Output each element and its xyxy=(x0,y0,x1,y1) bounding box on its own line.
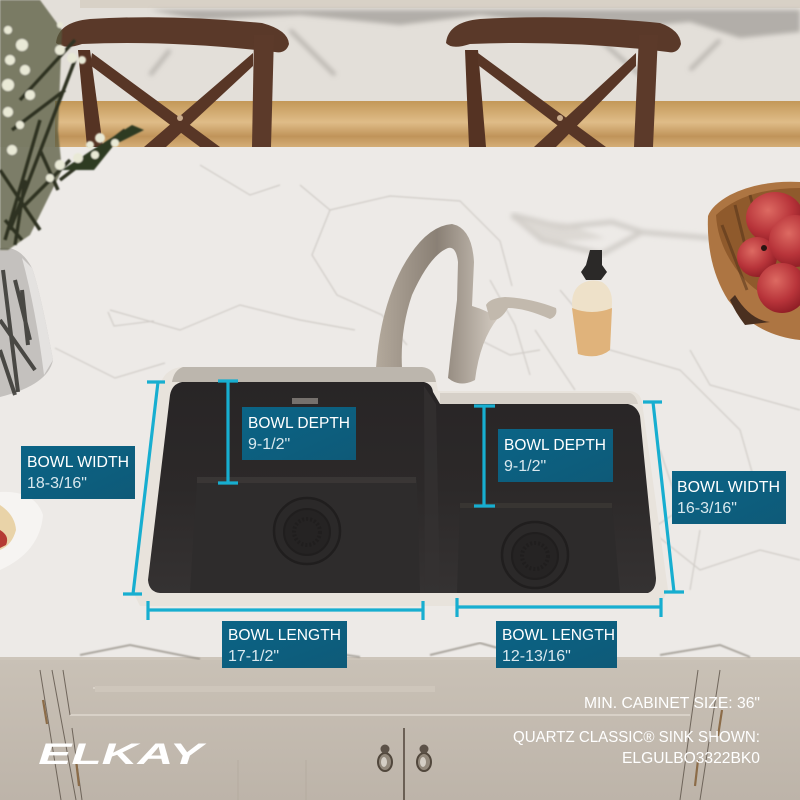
cabinet size text: MIN. CABINET SIZE: 36" xyxy=(584,695,760,712)
label: left bowl length xyxy=(222,621,347,668)
plant and vase xyxy=(0,0,144,397)
drain left xyxy=(274,498,340,564)
marble countertop xyxy=(0,147,800,660)
label: right bowl width: 16-3/16" xyxy=(677,500,737,517)
drain right xyxy=(502,522,568,588)
label: left bowl width: 18-3/16" xyxy=(27,475,87,492)
label: left bowl width xyxy=(21,446,135,499)
dimension: left bowl length xyxy=(147,601,423,620)
label: left bowl length: BOWL LENGTH xyxy=(228,627,341,644)
sink xyxy=(132,367,668,606)
label: right bowl width: BOWL WIDTH xyxy=(677,479,780,496)
label: right bowl depth: 9-1/2" xyxy=(504,458,546,475)
label: left bowl depth: 9-1/2" xyxy=(248,436,290,453)
rim xyxy=(132,367,668,606)
dimension: right bowl width xyxy=(643,402,684,592)
label: right bowl length: 12-13/16" xyxy=(502,648,571,665)
wooden bowl with apples xyxy=(708,182,800,340)
label: left bowl depth: BOWL DEPTH xyxy=(248,415,350,432)
divider xyxy=(424,386,440,593)
logo: Elkay: ELKAY xyxy=(38,737,207,771)
chair right xyxy=(446,17,681,147)
dimension: left bowl depth xyxy=(218,381,238,483)
label: right bowl length xyxy=(496,621,617,668)
faucet xyxy=(376,224,556,384)
chair left xyxy=(56,17,289,147)
background room: rug and floor xyxy=(0,0,800,148)
label: right bowl length: BOWL LENGTH xyxy=(502,627,615,644)
dimension: left bowl width xyxy=(123,382,165,594)
label: right bowl depth: BOWL DEPTH xyxy=(504,437,606,454)
floor right xyxy=(457,505,620,593)
sink model text: ELGULBO3322BK0 xyxy=(622,750,760,767)
dimension: right bowl length xyxy=(457,598,661,617)
basin xyxy=(148,382,656,593)
label: right bowl depth xyxy=(498,429,613,482)
label: left bowl width: BOWL WIDTH xyxy=(27,454,129,471)
label: left bowl depth xyxy=(242,407,356,460)
floor left xyxy=(190,480,420,593)
cabinet knobs xyxy=(378,744,431,771)
cabinet xyxy=(0,660,800,800)
soap dispenser xyxy=(572,250,612,356)
label: right bowl width xyxy=(672,471,786,524)
dimension: right bowl depth xyxy=(474,406,495,506)
label: left bowl length: 17-1/2" xyxy=(228,648,279,665)
sink model text xyxy=(513,729,760,767)
logo plate xyxy=(292,398,318,404)
plate with apple slice xyxy=(0,492,43,570)
sink model text: QUARTZ CLASSIC® SINK SHOWN: xyxy=(513,729,760,746)
